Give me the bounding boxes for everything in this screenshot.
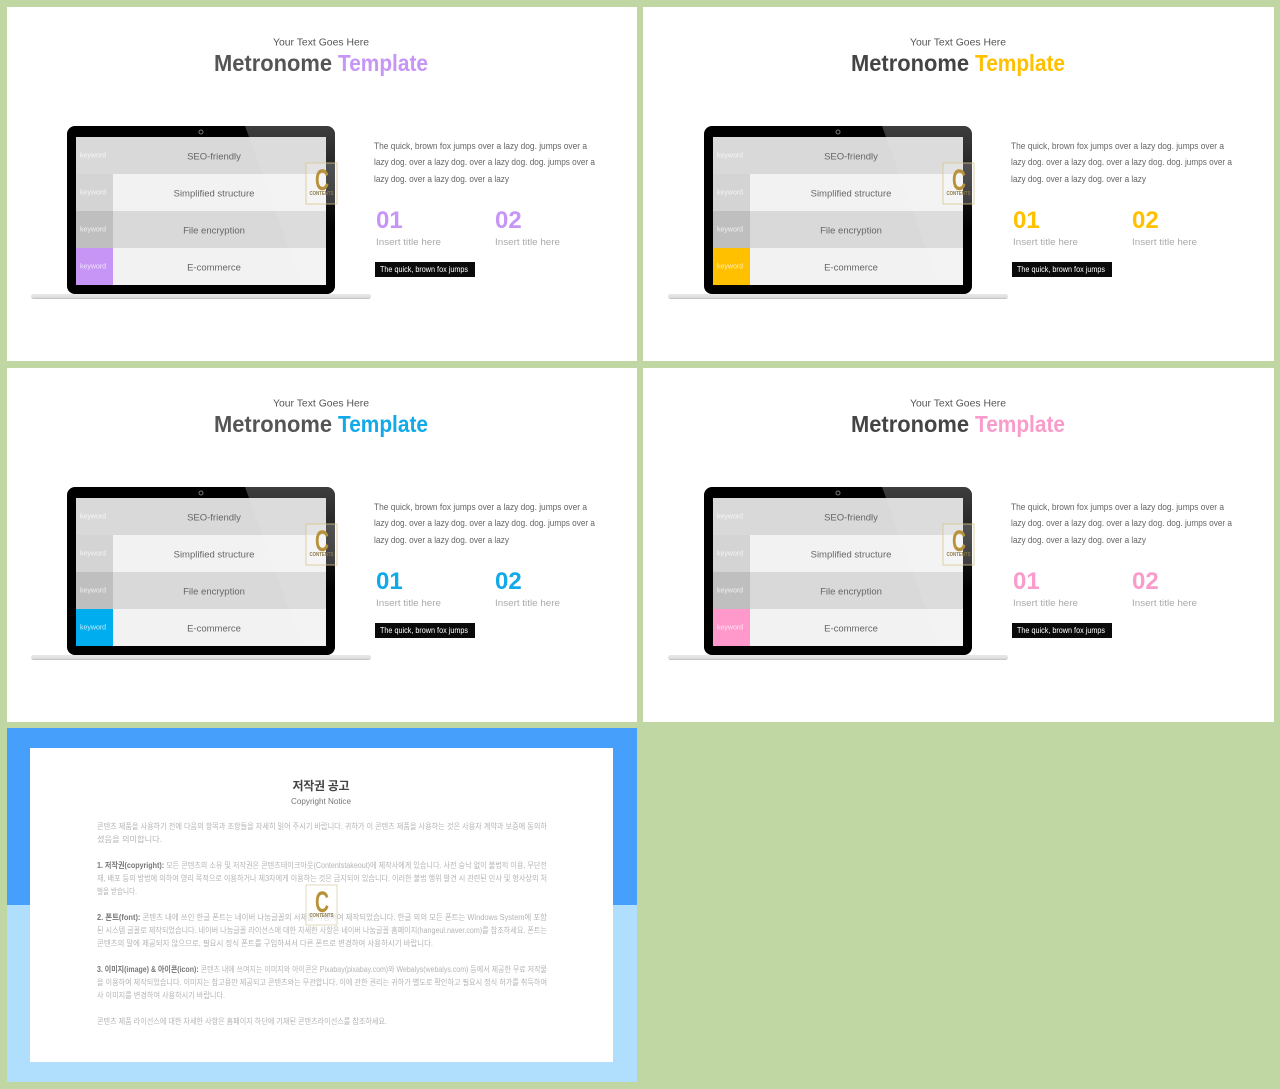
description: blue slide: lazy dog. over a lazy dog. over a lazy dog. dog. jumps over a xyxy=(374,518,595,528)
heading: purple slide: Template xyxy=(338,50,428,76)
laptop: purple slide: SEO-friendly xyxy=(187,152,241,162)
text block: copyright clause: 벌을 받습니다. xyxy=(97,886,137,896)
description: pink slide: The quick, brown fox jumps over a lazy dog. jumps over a xyxy=(1011,502,1224,512)
numbered items: yellow slide: Insert title here xyxy=(1132,237,1197,248)
numbered items: blue slide xyxy=(376,568,560,609)
watermark: pink slide: CONTENTS xyxy=(946,552,971,558)
text block: license note: 콘텐츠 제품 라이선스에 대한 자세한 사항은 홈페이지 하단에 기재된 콘텐츠라이선스를 참조하세요. xyxy=(97,1016,387,1026)
laptop: blue slide: Simplified structure xyxy=(174,550,254,560)
laptop: yellow slide: keyword xyxy=(717,152,743,160)
text block: copyright clause xyxy=(97,860,547,896)
laptop: blue slide: keyword xyxy=(80,550,106,558)
laptop: pink slide xyxy=(668,487,1008,660)
heading: blue slide xyxy=(214,398,428,437)
button: purple slide: The quick, brown fox jumps xyxy=(380,265,468,274)
watermark: purple slide xyxy=(306,163,337,204)
text block: copyright clause: 재, 배포 등의 방법에 의하여 영리 목적으로 이용하거나 제3자에게 이용하는 것은 금지되어 있습니다. 이러한 불법 행위 발견 시 관련된 민사 및 형사상의 처 xyxy=(97,873,547,883)
description: yellow slide xyxy=(1011,141,1232,184)
laptop: blue slide: File encryption xyxy=(183,586,245,598)
laptop: yellow slide: E-commerce xyxy=(824,262,878,274)
description: blue slide xyxy=(374,502,595,545)
heading: purple slide xyxy=(214,36,428,76)
laptop: blue slide xyxy=(31,487,371,660)
description: pink slide: lazy dog. over a lazy dog. over a lazy dog. dog. jumps over a xyxy=(1011,518,1232,528)
laptop: yellow slide xyxy=(668,126,1008,299)
watermark: blue slide: C xyxy=(315,525,329,558)
watermark: copyright notice: C xyxy=(315,886,329,919)
watermark: copyright notice xyxy=(306,885,337,925)
numbered items: pink slide: Insert title here xyxy=(1132,598,1197,609)
watermark: blue slide: CONTENTS xyxy=(310,552,334,558)
description: yellow slide: lazy dog. over a lazy dog. over a lazy xyxy=(1011,174,1146,184)
numbered items: purple slide: 02 xyxy=(495,207,522,234)
numbered items: yellow slide: 02 xyxy=(1132,207,1159,234)
text block: font clause: 콘텐츠의 말에 제공되지 않으므로, 필요시 정식 폰트를 구입하셔서 다른 폰트로 변경하여 사용하시기 바랍니다. xyxy=(97,938,433,948)
heading: purple slide: Your Text Goes Here xyxy=(273,36,369,48)
heading: pink slide xyxy=(851,398,1065,437)
button: blue slide: The quick, brown fox jumps xyxy=(380,626,468,635)
laptop: purple slide: keyword xyxy=(80,264,106,270)
watermark: pink slide xyxy=(943,524,974,565)
heading: pink slide: Metronome xyxy=(851,411,969,437)
button: pink slide: The quick, brown fox jumps xyxy=(1017,626,1105,635)
description: purple slide: lazy dog. over a lazy dog. over a lazy dog. dog. jumps over a xyxy=(374,157,595,167)
text block: image and icon clause xyxy=(97,964,547,1000)
laptop: yellow slide: File encryption xyxy=(820,226,882,236)
numbered items: purple slide xyxy=(376,207,560,248)
description: blue slide: lazy dog. over a lazy dog. over a lazy xyxy=(374,535,509,545)
button: yellow slide xyxy=(1012,262,1112,277)
numbered items: blue slide: Insert title here xyxy=(376,598,441,609)
numbered items: blue slide: Insert title here xyxy=(495,598,560,609)
heading: pink slide: Your Text Goes Here xyxy=(910,398,1006,410)
text block: copyright clause: 1. 저작권(copyright): 모든 콘텐츠의 소유 및 저작권은 콘텐츠테이크아웃(Contentstakeout)에 제작사에게 있습니다. 사전 승낙 없이 불법적 이용, 무단전 xyxy=(97,860,547,870)
laptop: pink slide: keyword xyxy=(717,550,743,558)
laptop: purple slide: keyword xyxy=(80,152,106,160)
panel: slide blue xyxy=(7,368,637,722)
laptop: yellow slide: keyword xyxy=(717,264,743,270)
description: pink slide: lazy dog. over a lazy dog. over a lazy xyxy=(1011,535,1146,545)
laptop: purple slide xyxy=(31,126,371,299)
numbered items: yellow slide xyxy=(1013,207,1197,248)
laptop: blue slide: E-commerce xyxy=(187,624,241,634)
watermark: copyright notice: CONTENTS xyxy=(310,913,334,919)
text block: font clause xyxy=(97,912,548,948)
numbered items: pink slide: 01 xyxy=(1013,568,1040,595)
numbered items: purple slide: 01 xyxy=(376,207,403,234)
text block: font clause: 2. 폰트(font): 콘텐츠 내에 쓰인 한글 폰트는 네이버 나눔글꼴의 서체를 사용하여 제작되었습니다. 한글 외의 모든 폰트는 Windows System에 포함 xyxy=(97,912,548,922)
laptop: blue slide: keyword xyxy=(80,624,106,632)
text block: intro: 셨음을 의미합니다. xyxy=(97,834,162,844)
laptop: pink slide: SEO-friendly xyxy=(824,512,878,524)
laptop: purple slide: File encryption xyxy=(183,226,245,236)
heading: yellow slide: Metronome xyxy=(851,50,969,76)
text block: font clause: 된 시스템 글꼴로 제작되었습니다. 네이버 나눔글꼴 라이선스에 대한 자세한 사항은 네이버 나눔글꼴 홈페이지(hangeul.naver.com)를 참조하세요. 폰트는 xyxy=(97,925,547,935)
heading: copyright notice: Copyright Notice xyxy=(291,796,351,806)
panel: copyright notice xyxy=(7,728,637,1082)
description: blue slide: The quick, brown fox jumps over a lazy dog. jumps over a xyxy=(374,502,587,512)
heading: copyright notice xyxy=(291,778,351,806)
description: purple slide: The quick, brown fox jumps over a lazy dog. jumps over a xyxy=(374,141,587,151)
numbered items: yellow slide: Insert title here xyxy=(1013,237,1078,248)
laptop: pink slide: keyword xyxy=(717,588,743,594)
numbered items: blue slide: 02 xyxy=(495,568,522,595)
laptop: purple slide: Simplified structure xyxy=(174,188,254,200)
watermark: pink slide: C xyxy=(952,525,966,558)
heading: purple slide: Metronome xyxy=(214,50,332,76)
watermark: yellow slide xyxy=(943,163,974,204)
numbered items: purple slide: Insert title here xyxy=(495,237,560,248)
laptop: yellow slide: keyword xyxy=(717,190,743,196)
laptop: yellow slide: Simplified structure xyxy=(811,188,891,200)
laptop: blue slide: keyword xyxy=(80,588,106,594)
heading: yellow slide: Template xyxy=(975,50,1065,76)
laptop: pink slide: File encryption xyxy=(820,586,882,598)
heading: yellow slide xyxy=(851,36,1065,76)
text block: intro: 콘텐츠 제품을 사용하기 전에 다음의 항목과 조항들을 자세히 읽어 주시기 바랍니다. 귀하가 이 콘텐츠 제품을 사용하는 것은 사용자 계약과 보증에 동의하 xyxy=(97,821,548,831)
watermark: purple slide: CONTENTS xyxy=(310,191,334,197)
laptop: blue slide: SEO-friendly xyxy=(187,512,241,524)
laptop: pink slide: keyword xyxy=(717,514,743,520)
laptop: purple slide: keyword xyxy=(80,190,106,196)
text block: intro xyxy=(97,821,548,844)
laptop: purple slide: E-commerce xyxy=(187,262,241,274)
description: yellow slide: The quick, brown fox jumps over a lazy dog. jumps over a xyxy=(1011,141,1224,151)
panel: slide purple xyxy=(7,7,637,361)
heading: blue slide: Template xyxy=(338,411,428,437)
laptop: pink slide: E-commerce xyxy=(824,624,878,634)
laptop: yellow slide: keyword xyxy=(717,226,743,234)
description: purple slide: lazy dog. over a lazy dog. over a lazy xyxy=(374,174,509,184)
heading: blue slide: Your Text Goes Here xyxy=(273,398,369,410)
button: pink slide xyxy=(1012,623,1112,638)
heading: blue slide: Metronome xyxy=(214,411,332,437)
laptop: pink slide: Simplified structure xyxy=(811,550,891,560)
heading: yellow slide: Your Text Goes Here xyxy=(910,36,1006,48)
heading: pink slide: Template xyxy=(975,411,1065,437)
panel: slide yellow xyxy=(643,7,1274,361)
heading: copyright notice: 저작권 공고 xyxy=(292,778,350,793)
numbered items: pink slide: 02 xyxy=(1132,568,1159,595)
numbered items: purple slide: Insert title here xyxy=(376,237,441,248)
numbered items: pink slide xyxy=(1013,568,1197,609)
numbered items: blue slide: 01 xyxy=(376,568,403,595)
watermark: blue slide xyxy=(306,524,337,565)
description: yellow slide: lazy dog. over a lazy dog. over a lazy dog. dog. jumps over a xyxy=(1011,157,1232,167)
watermark: yellow slide: C xyxy=(952,164,966,197)
numbered items: yellow slide: 01 xyxy=(1013,207,1040,234)
button: purple slide xyxy=(375,262,475,277)
laptop: pink slide: keyword xyxy=(717,624,743,632)
text block: image and icon clause: 사 이미지를 변경하여 사용하시기 바랍니다. xyxy=(97,990,225,1000)
text block: image and icon clause: 3. 이미지(image) & 아이콘(icon): 콘텐츠 내에 쓰여지는 이미지와 아이콘은 Pixabay(pixabay.com)와 Webalys(webalys.com) 등에서 제공한 무료 저작물 xyxy=(97,964,547,974)
numbered items: pink slide: Insert title here xyxy=(1013,598,1078,609)
laptop: blue slide: keyword xyxy=(80,514,106,520)
panel: slide pink xyxy=(643,368,1274,722)
description: pink slide xyxy=(1011,502,1232,545)
laptop: purple slide: keyword xyxy=(80,226,106,234)
text block: image and icon clause: 을 이용하여 제작되었습니다. 이미지는 참고용만 제공되고 콘텐츠와는 무관합니다. 이에 관한 권리는 귀하가 별도로 확인하고 필요시 정식 허가를 취득하여 xyxy=(97,977,547,987)
watermark: yellow slide: CONTENTS xyxy=(946,191,971,197)
laptop: yellow slide: SEO-friendly xyxy=(824,152,878,162)
button: yellow slide: The quick, brown fox jumps xyxy=(1017,265,1105,274)
description: purple slide xyxy=(374,141,595,184)
watermark: purple slide: C xyxy=(315,164,329,197)
button: blue slide xyxy=(375,623,475,638)
